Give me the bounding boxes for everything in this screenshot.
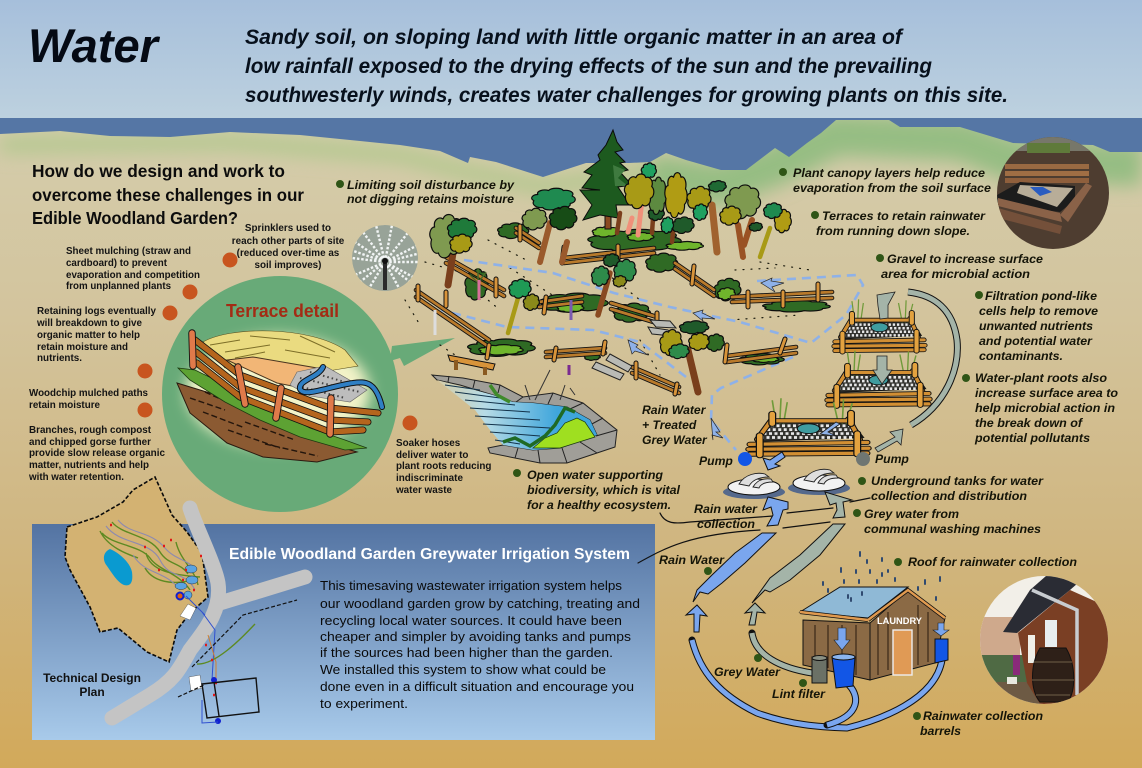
label: rain water collection [694,502,758,531]
labels: water lines [858,474,1044,503]
note: sprinklers: (reduced over-time as [237,248,340,259]
note: soaker hoses: plant roots reducing [396,461,491,472]
straw [203,331,358,372]
conifer [580,130,632,229]
panel body text: our woodland garden grow by catching, treating and [320,596,640,611]
laundry building [800,552,949,688]
note: grey water source: Grey water from [864,507,959,521]
cardboard [227,357,317,387]
note: gravel: area for microbial action [881,267,1030,281]
photo: sprinkler [352,225,418,291]
panel body text: cheaper and simpler by avoiding tanks and pumps [320,629,631,644]
arrow: terrace detail pointer [390,338,455,366]
barrel [1032,648,1074,702]
terrace fences [416,226,832,394]
note: open water: for a healthy ecosystem. [527,498,671,512]
note: limiting soil disturbance: not digging retains moisture [347,192,514,206]
rain drops [823,552,940,601]
labels: water lines: collection and distribution [871,489,1027,503]
front wall [803,620,870,680]
note: water-plant roots [962,371,1119,445]
soil layer [177,383,357,462]
gray flow arrows [820,292,895,436]
orange markers [138,252,418,430]
blue irrigation dashes [441,260,863,450]
note: retaining logs: retain moisture and [37,342,128,353]
grey water pipe [752,633,812,673]
raised filtration beds [748,292,957,455]
note: limiting soil disturbance: Limiting soil disturbance by [347,178,515,192]
panel body text: if the sources had been higher than the garden. [320,645,613,660]
technical design plan map: Plan [79,685,105,699]
building outline [202,678,259,718]
panel heading: Edible Woodland Garden Greywater Irrigation System [229,546,630,563]
note: soaker hoses: indiscriminate [396,473,463,484]
downpipe [1032,590,1077,695]
label: rain water [659,553,725,575]
blue barrel [832,654,855,688]
door [893,630,912,675]
note: woodchip: Woodchip mulched paths [29,388,149,399]
question heading: overcome these challenges in our [32,185,304,205]
green strip [178,368,367,450]
note: water-plant roots: potential pollutants [974,431,1090,445]
panel body text: to experiment. [320,696,408,711]
note: plant canopy: Plant canopy layers help reduce [793,166,985,180]
note: soaker hoses: deliver water to [396,450,468,461]
map label: Technical Design [43,671,141,685]
blue flow arrows [628,278,784,440]
label: rain and treated grey water: Grey Water [642,433,708,447]
canopy: forest center cluster [624,163,694,233]
pond [432,370,617,463]
roof [800,587,908,618]
label: rain and treated grey water: + Treated [642,418,697,432]
label: lint filter: Lint filter [772,687,826,701]
ground stipple [405,240,810,375]
leader lines [638,498,870,563]
panel body text: done even in a difficult situation and encourage you [320,679,634,694]
pump markers: Pump [875,452,909,466]
question heading [32,161,304,228]
note: filtration cells: unwanted nutrients [979,319,1093,333]
note: soaker hoses: water waste [395,485,452,496]
note: sprinklers: soil improves) [255,260,321,271]
lint filter barrel [812,656,827,683]
note: open water [513,468,681,512]
label: rain water collection: Rain water [694,502,758,516]
bench [448,355,495,375]
boundary dashes [178,685,204,697]
note: branches [28,425,166,483]
technical design plan map [43,477,305,724]
note: filtration cells: contaminants. [979,349,1063,363]
photo: rainwater barrel [980,576,1108,706]
note: sprinklers: Sprinklers used to [245,223,331,234]
garden illustration [405,130,863,463]
top header band [0,0,1142,118]
note: retaining logs: nutrients. [37,353,82,364]
note: soaker hoses [395,438,491,496]
note: water-plant roots: help microbial action in [975,401,1115,415]
note: branches: and chipped gorse further [29,437,151,448]
panel: greywater irrigation system [32,524,655,740]
note: limiting soil disturbance [336,178,515,206]
canopy: upper terrace tree [522,188,577,230]
labels: water lines: Underground tanks for water [871,474,1044,488]
intro text [245,25,1008,107]
note: sprinklers [232,223,345,271]
note: grey water source [853,507,1041,536]
note: branches: matter, nutrients and help [29,460,149,471]
note: woodchip: retain moisture [29,400,101,411]
woodchip [290,366,367,402]
note: plant canopy [779,166,991,195]
canopy: center tree [591,254,636,287]
aquatic plants [533,418,595,448]
gray pump arrow [875,429,903,452]
label: rain water collection: collection [697,517,755,531]
intro text: Sandy soil, on sloping land with little organic matter in an area of [245,25,904,49]
intro text: low rainfall exposed to the drying effects of the sun and the prevailing [245,54,932,78]
panel body text [320,578,640,711]
planting contours [100,522,200,590]
gable wall [870,590,945,680]
note: water-plant roots: increase surface area to [975,386,1119,400]
panel body text: recycling local water sources. It could have been [320,613,622,628]
sky blue horizon band [0,118,1142,177]
label: grey water [714,654,781,679]
pump markers: Pump [699,454,733,468]
note: rainwater barrels: Rainwater collection [923,709,1043,723]
photo: constructed beds [997,137,1109,249]
note: woodchip [29,388,149,411]
note: sheet mulching: Sheet mulching (straw and [66,246,191,257]
question heading: How do we design and work to [32,161,285,181]
wall [1018,590,1108,704]
note: filtration cells: cells help to remove [979,304,1098,318]
trees [430,130,791,392]
lake [104,549,132,585]
stone ring [432,375,617,463]
pumps and tanks [110,525,255,724]
panel body text: We installed this system to show what could be [320,662,606,677]
note: retaining logs: Retaining logs eventually [37,306,157,317]
young saplings [435,268,571,375]
terrace logs [195,340,378,432]
forest trunks [448,200,770,392]
terrace detail circle [162,276,455,512]
note: filtration cells: Filtration pond-like [985,289,1097,303]
label: rain and treated grey water [642,403,708,447]
note: retaining logs: will breakdown to give [36,318,142,329]
note: terraces: from running down slope. [816,224,970,238]
title: Water [28,19,161,72]
note: filtration cells [975,289,1098,363]
note: rainwater barrels: barrels [920,724,961,738]
note: water-plant roots: the break down of [975,416,1084,430]
note: sheet mulching [66,246,200,292]
note: plant canopy: evaporation from the soil surface [793,181,991,195]
canopy: front tree [660,321,709,359]
window and door [1045,620,1057,647]
label: rain water: Rain Water [659,553,725,567]
intro text: southwesterly winds, creates water challenges for growing plants on this site. [245,83,1008,107]
label: grey water: Grey Water [714,665,781,679]
curved gray return arrow [908,292,957,425]
note: filtration cells: and potential water [979,334,1093,348]
side barrel [935,639,948,663]
note: sheet mulching: from unplanned plants [66,281,171,292]
note: sheet mulching: evaporation and competition [66,270,200,281]
note: branches: Branches, rough compost [29,425,152,436]
note: sheet mulching: cardboard) to prevent [66,258,168,269]
note: branches: provide slow release organic [29,448,166,459]
filtration ponds [175,565,198,599]
note: gravel [876,252,1043,281]
underground tanks [723,469,850,499]
roof [1003,576,1076,633]
canopy: low tree [509,279,539,310]
note: sprinklers: reach other parts of site [232,236,345,247]
road [112,508,305,718]
canopy: forest right cluster [687,181,762,231]
canopy: left tree [430,214,477,258]
note: retaining logs [36,306,157,364]
pump markers [699,452,909,468]
water [437,380,597,450]
green hill haze [0,135,1142,187]
roof drain arrows [834,628,850,650]
soaker hose [300,367,382,407]
note: rainwater barrels [913,709,1043,738]
note: open water: Open water supporting [527,468,664,482]
label: lint filter [772,679,826,701]
stone steps [592,320,676,380]
rainwater pipes and arrows [686,452,942,728]
note: branches: with water retention. [28,472,124,483]
note: soaker hoses: Soaker hoses [396,438,461,449]
note: roof collection: Roof for rainwater collection [908,555,1077,569]
note: water-plant roots: Water-plant roots also [975,371,1108,385]
green shrubs [465,223,830,365]
note: retaining logs: organic matter to help [37,330,140,341]
label: rain and treated grey water: Rain Water [642,403,707,417]
question heading: Edible Woodland Garden? [32,208,238,228]
canopy: small right tree [764,203,791,233]
note: gravel: Gravel to increase surface [887,252,1043,266]
laundry sign: LAUNDRY [877,616,923,627]
note: terraces [811,209,986,238]
terrace detail circle: Terrace detail [226,301,339,321]
note: grey water source: communal washing machines [864,522,1041,536]
site boundary [65,477,208,662]
note: terraces: Terraces to retain rainwater [822,209,986,223]
panel body text: This timesaving wastewater irrigation system helps [320,578,622,593]
note: open water: biodiversity, which is vital [527,483,681,497]
